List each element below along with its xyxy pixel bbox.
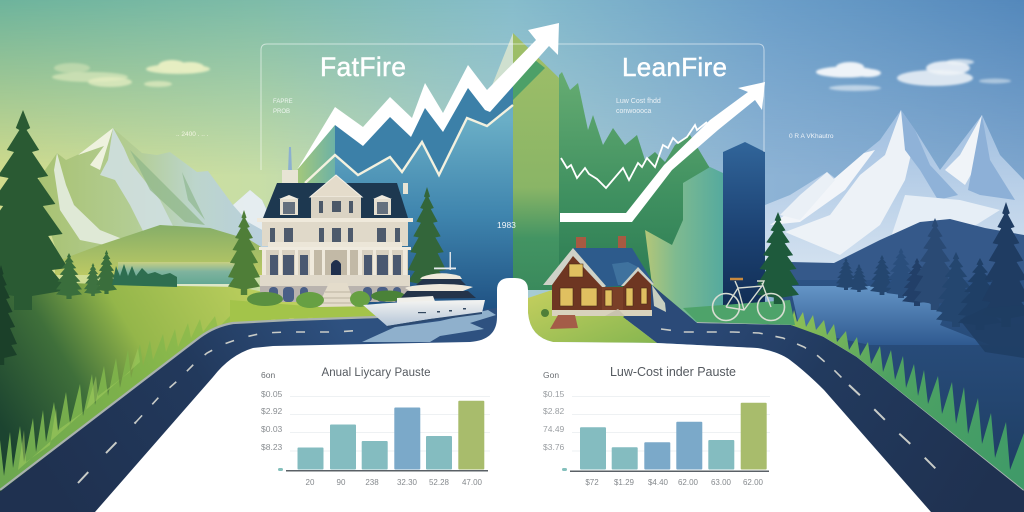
center olive column [513, 33, 559, 290]
center year label: 1983 [497, 220, 516, 230]
title fatfire: FatFire [320, 52, 406, 82]
right chart x labels [585, 478, 764, 487]
left meadow [0, 280, 380, 495]
fatfire note: FAPRE [273, 99, 293, 105]
left chart title: Anual Liycary Pauste [322, 367, 430, 379]
leanfire note: conwoooca [616, 108, 652, 115]
fatfire white growth arrow [297, 23, 559, 170]
leanfire note [616, 98, 661, 115]
left chart x labels: 90 [337, 478, 346, 487]
tree beside mansion [408, 187, 446, 292]
left grass blades [0, 310, 378, 490]
fatfire cream line [305, 105, 513, 183]
left bar chart [261, 367, 490, 487]
right mountains [765, 110, 1024, 270]
leanfire thin growth line [561, 122, 707, 188]
right chart x labels: 63.00 [711, 478, 732, 487]
leanfire note: Luw Cost fhdd [616, 98, 661, 105]
right chart x labels: 62.00 [678, 478, 699, 487]
right hill [790, 219, 1024, 290]
left chart axis labels: $0.05 [261, 389, 283, 399]
glass frame [261, 44, 764, 170]
left chart x labels: 52.28 [429, 478, 450, 487]
left chart x labels: 20 [306, 478, 315, 487]
left hill and lake [55, 225, 285, 287]
clouds right [816, 59, 1011, 91]
leanfire white arrow [560, 82, 765, 222]
tree beside bicycle [757, 212, 799, 304]
right bar chart [543, 365, 770, 487]
left chart axis labels [261, 389, 283, 452]
right sky note: 0 R A VKhautro [789, 133, 834, 140]
left chart unit: 6on [261, 370, 275, 380]
left road [0, 308, 497, 512]
bicycle [712, 279, 784, 320]
left trees [0, 110, 260, 365]
left chart x labels: 32.30 [397, 478, 418, 487]
right chart axis labels: 74.49 [543, 424, 565, 434]
yacht wake [362, 310, 496, 342]
title leanfire: LeanFire [622, 52, 727, 82]
small house [541, 236, 666, 329]
left chart x labels: 238 [365, 478, 379, 487]
right chart x labels: $1.29 [614, 478, 635, 487]
right chart axis labels: $2.82 [543, 406, 565, 416]
right chart axis labels: $3.76 [543, 442, 565, 452]
right grass blades [791, 310, 1024, 490]
left chart x labels: 47.00 [462, 478, 483, 487]
left chart axis labels: $2.92 [261, 406, 283, 416]
right chart bars [580, 403, 767, 470]
leanfire green peaks [559, 72, 715, 320]
right chart unit: Gon [543, 370, 559, 380]
right road [623, 285, 1024, 512]
left chart x labels [306, 478, 483, 487]
left chart axis labels: $0.03 [261, 424, 283, 434]
right forest [836, 202, 1024, 358]
clouds left [52, 60, 210, 87]
center chart: fatfire area [297, 33, 513, 310]
white chart panel [95, 278, 931, 512]
left mountains [38, 128, 280, 262]
bike ground strip [683, 300, 795, 325]
fatfire note: PROB [273, 109, 290, 115]
right chart title: Luw-Cost inder Pauste [610, 365, 736, 379]
fatfire note [273, 99, 293, 115]
yacht [363, 252, 485, 328]
right chart x labels: $4.40 [648, 478, 669, 487]
left sky note: .. 2400 . .. . [176, 131, 209, 138]
left chart axis labels: $8.23 [261, 442, 283, 452]
leanfire olive-teal column [645, 167, 723, 323]
background sky [0, 0, 1024, 354]
right ground and river [780, 280, 1024, 512]
right chart axis labels: $0.15 [543, 389, 565, 399]
right chart x labels: 62.00 [743, 478, 764, 487]
mansion lawn and shrubs [230, 290, 405, 323]
mansion [257, 147, 413, 308]
small house yard [528, 290, 657, 343]
right chart axis labels [543, 389, 565, 452]
leanfire navy column [723, 142, 765, 322]
right chart x labels: $72 [585, 478, 599, 487]
left chart bars [298, 401, 484, 470]
